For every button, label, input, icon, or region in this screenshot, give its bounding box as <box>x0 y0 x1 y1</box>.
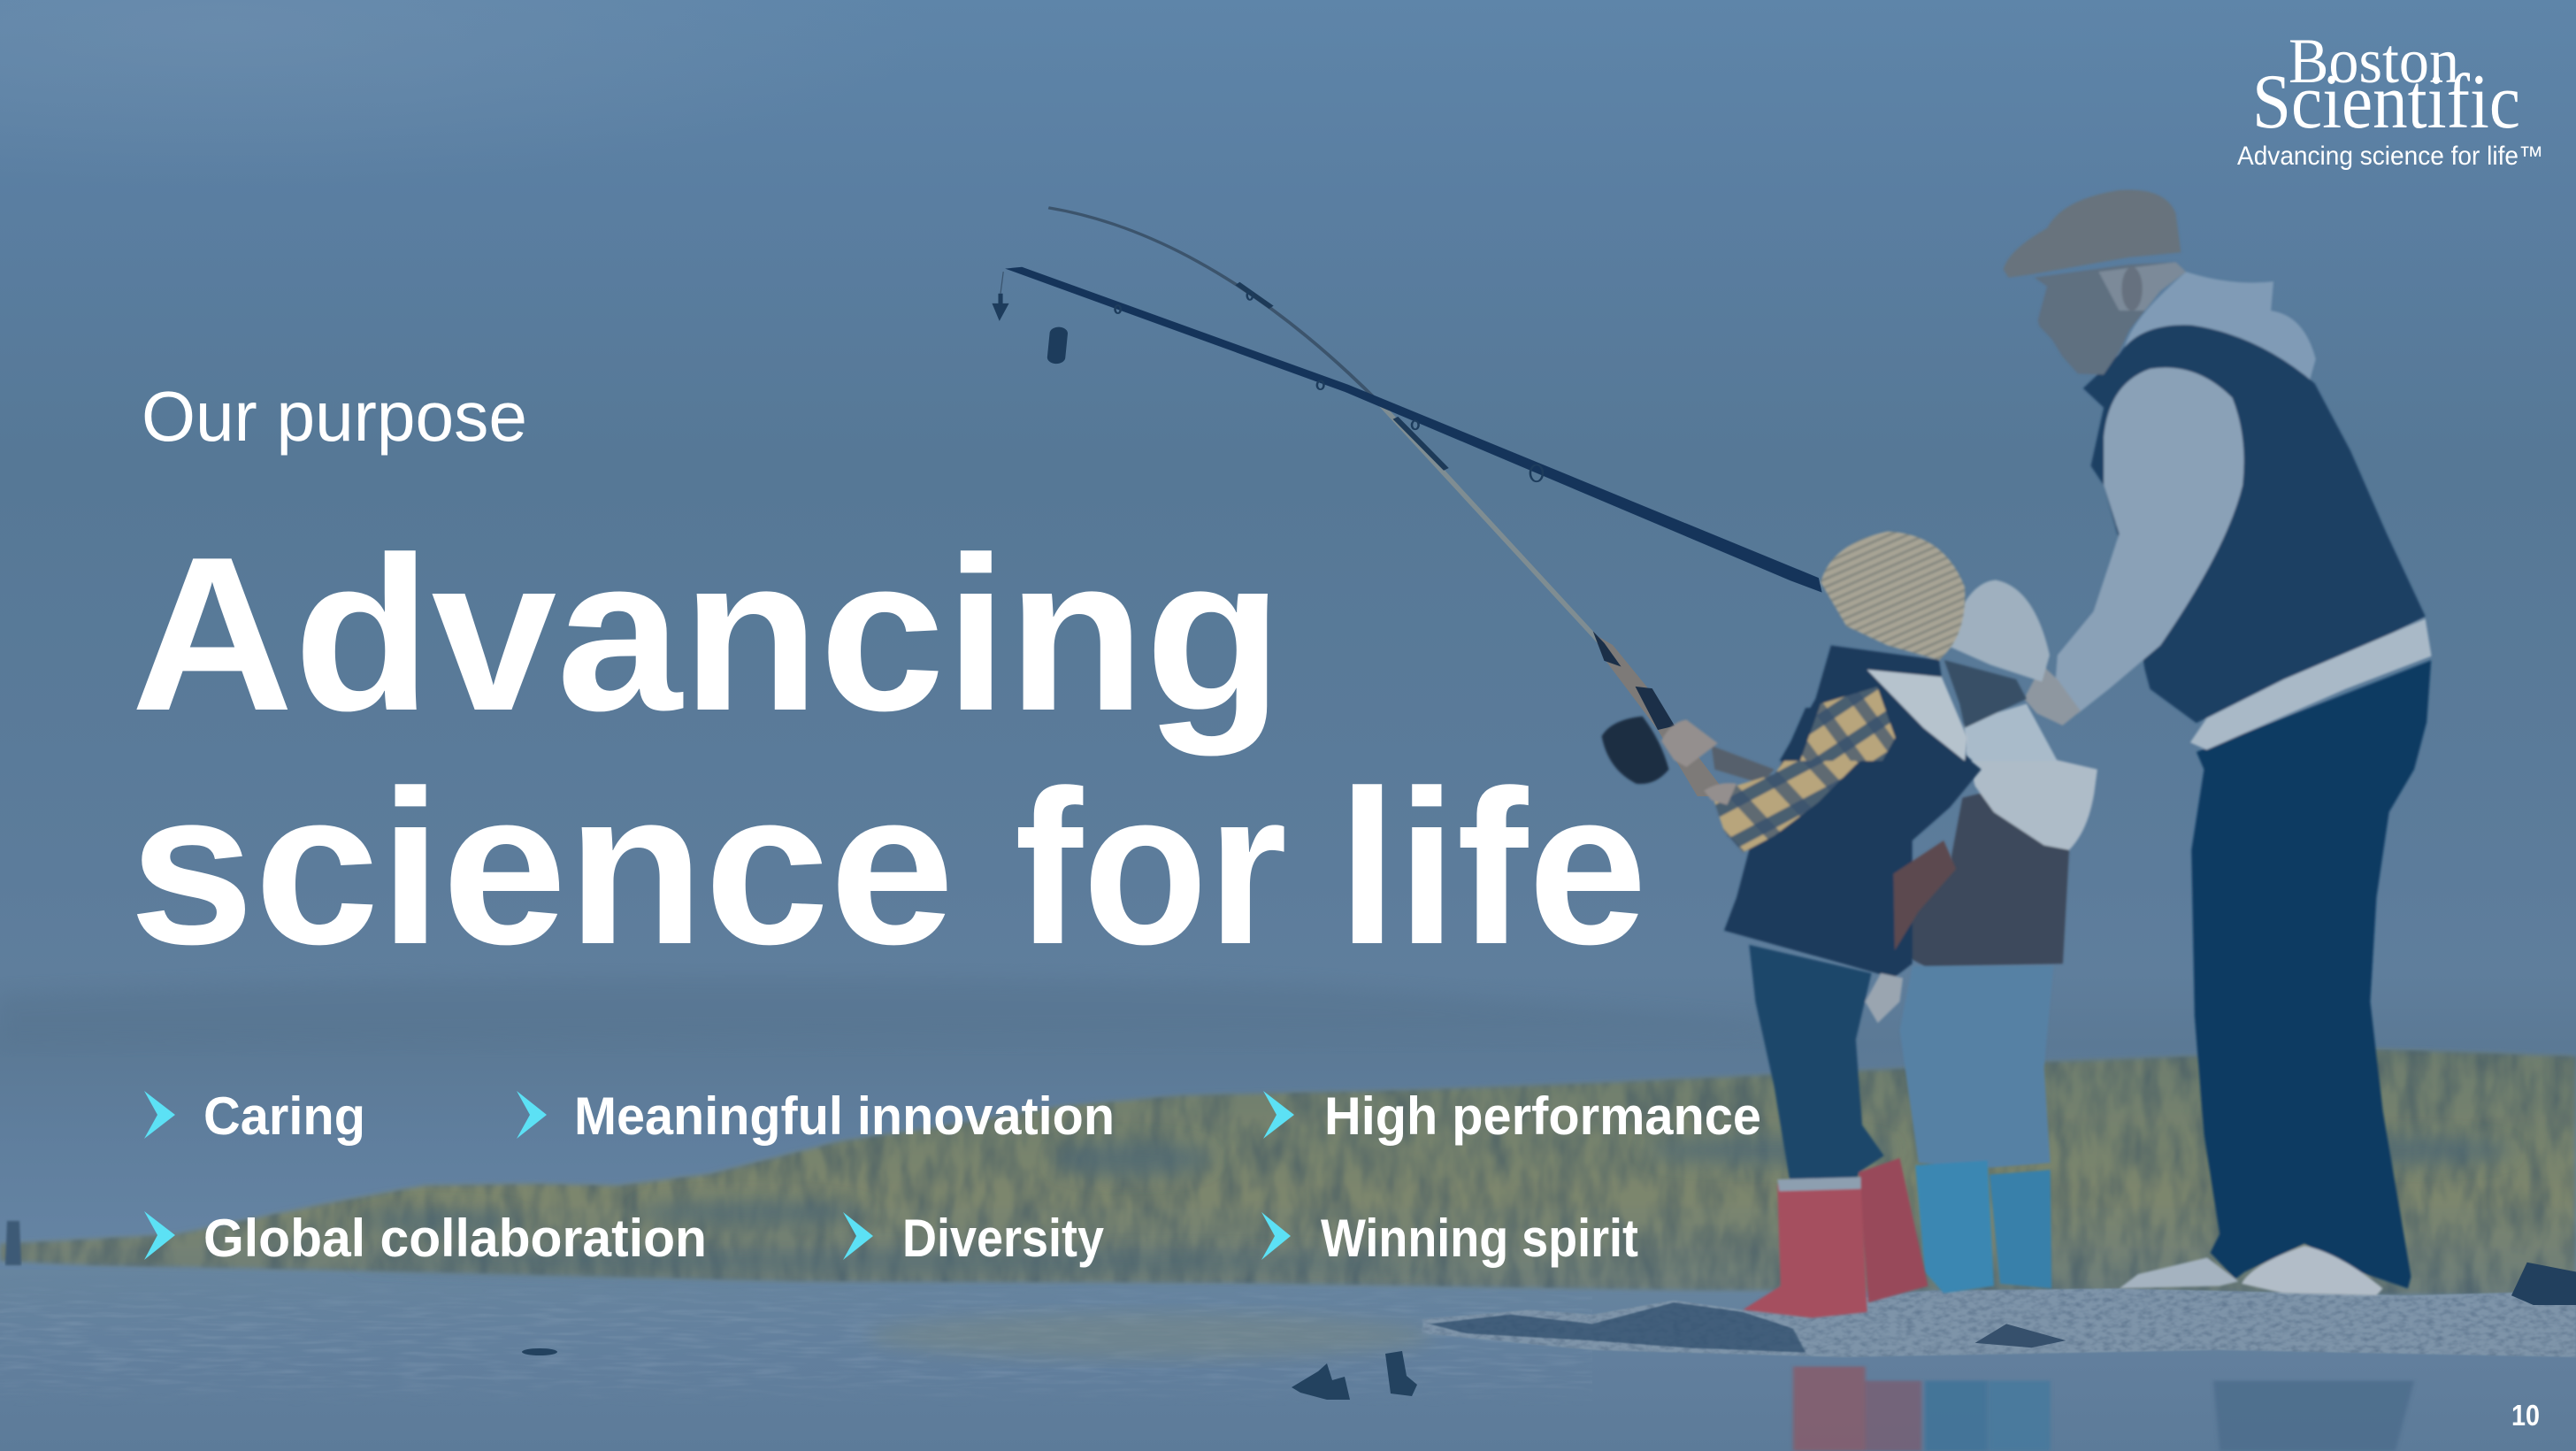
boot cuff <box>1777 1177 1861 1191</box>
puffer vest <box>1893 793 2069 966</box>
guides <box>1115 291 1543 481</box>
logo: Boston Scientific <box>2237 26 2543 171</box>
plaid sleeve <box>1712 708 1893 852</box>
title word: science: science <box>129 744 954 990</box>
wordmark Scientific: Scientific <box>2252 59 2520 145</box>
shoulders <box>1964 703 2058 761</box>
beanie <box>1821 532 1965 660</box>
hand <box>2024 664 2081 726</box>
clods <box>1430 1302 1806 1353</box>
face <box>2035 262 2186 374</box>
hands on rod <box>1661 719 1718 767</box>
rod butt <box>1596 635 1729 796</box>
value: Global collaboration: Global collaboration <box>203 1209 707 1268</box>
value: Winning spirit: Winning spirit <box>1321 1209 1638 1268</box>
jeans <box>1749 945 1884 1182</box>
values list <box>144 1086 1761 1268</box>
sand bar <box>1423 1263 2576 1357</box>
vest <box>1724 708 1982 978</box>
figure reflections <box>1793 1367 2414 1451</box>
far post <box>5 1221 21 1265</box>
value: Diversity: Diversity <box>902 1209 1105 1268</box>
distant horizon band <box>0 977 1858 1044</box>
photo: grandfather <box>2004 190 2432 1295</box>
water ripples <box>0 1308 1566 1381</box>
muddy reflection <box>867 1313 1433 1359</box>
value: High performance: High performance <box>1324 1086 1761 1146</box>
collar <box>1780 646 1973 761</box>
hood <box>1966 715 2097 850</box>
sleeve top <box>1800 687 1896 761</box>
line and lure <box>1000 272 1003 294</box>
beanie <box>1947 580 2050 682</box>
title line 1: Advancing <box>131 511 1283 756</box>
wordmark Boston: Boston <box>2288 26 2459 96</box>
sand grit <box>1423 1288 2576 1357</box>
head <box>1944 660 2027 728</box>
red boots <box>1859 1158 1928 1302</box>
subtitle: Our purpose <box>142 377 527 456</box>
hand <box>1866 973 1903 1023</box>
vest <box>2083 325 2426 723</box>
waistband <box>2190 618 2432 749</box>
lure <box>992 294 1009 321</box>
lighter sky at top left <box>0 0 929 186</box>
water <box>0 1270 2576 1451</box>
photo: child in red boots <box>1602 532 1982 1317</box>
photo: fishing rods <box>992 208 1822 796</box>
cap <box>2004 190 2181 278</box>
tagline: Advancing science for life™ <box>2237 142 2543 171</box>
title <box>129 511 1647 990</box>
upper body <box>2004 190 2432 749</box>
dune <box>0 1049 2576 1296</box>
photo: child in blue boots <box>1893 580 2097 1294</box>
hair <box>2098 262 2186 311</box>
jeans <box>1900 966 2053 1168</box>
sinker <box>1046 326 1069 365</box>
thick rod <box>1005 267 1822 593</box>
stones in water <box>522 1348 1417 1400</box>
dune shadows <box>354 1136 2512 1270</box>
forearm <box>1712 746 1775 784</box>
lower hand <box>1704 783 1736 805</box>
shoes <box>2242 1246 2383 1295</box>
page number: 10 <box>2511 1399 2540 1432</box>
ear <box>2121 267 2143 311</box>
title word: life: life <box>1338 744 1647 990</box>
sleeve <box>2055 367 2244 713</box>
sleeve and arm patch <box>1893 841 1956 950</box>
title word: for: for <box>1015 744 1287 990</box>
fleece lining <box>1867 670 1967 761</box>
value: Meaningful innovation: Meaningful innovation <box>574 1086 1115 1146</box>
reel <box>1602 717 1669 784</box>
hood <box>2124 272 2316 381</box>
blue boots <box>1915 1161 1994 1294</box>
dune grass texture <box>0 1049 2576 1296</box>
trousers <box>2120 660 2431 1295</box>
thin rod <box>1048 208 1378 402</box>
value: Caring: Caring <box>203 1086 365 1146</box>
